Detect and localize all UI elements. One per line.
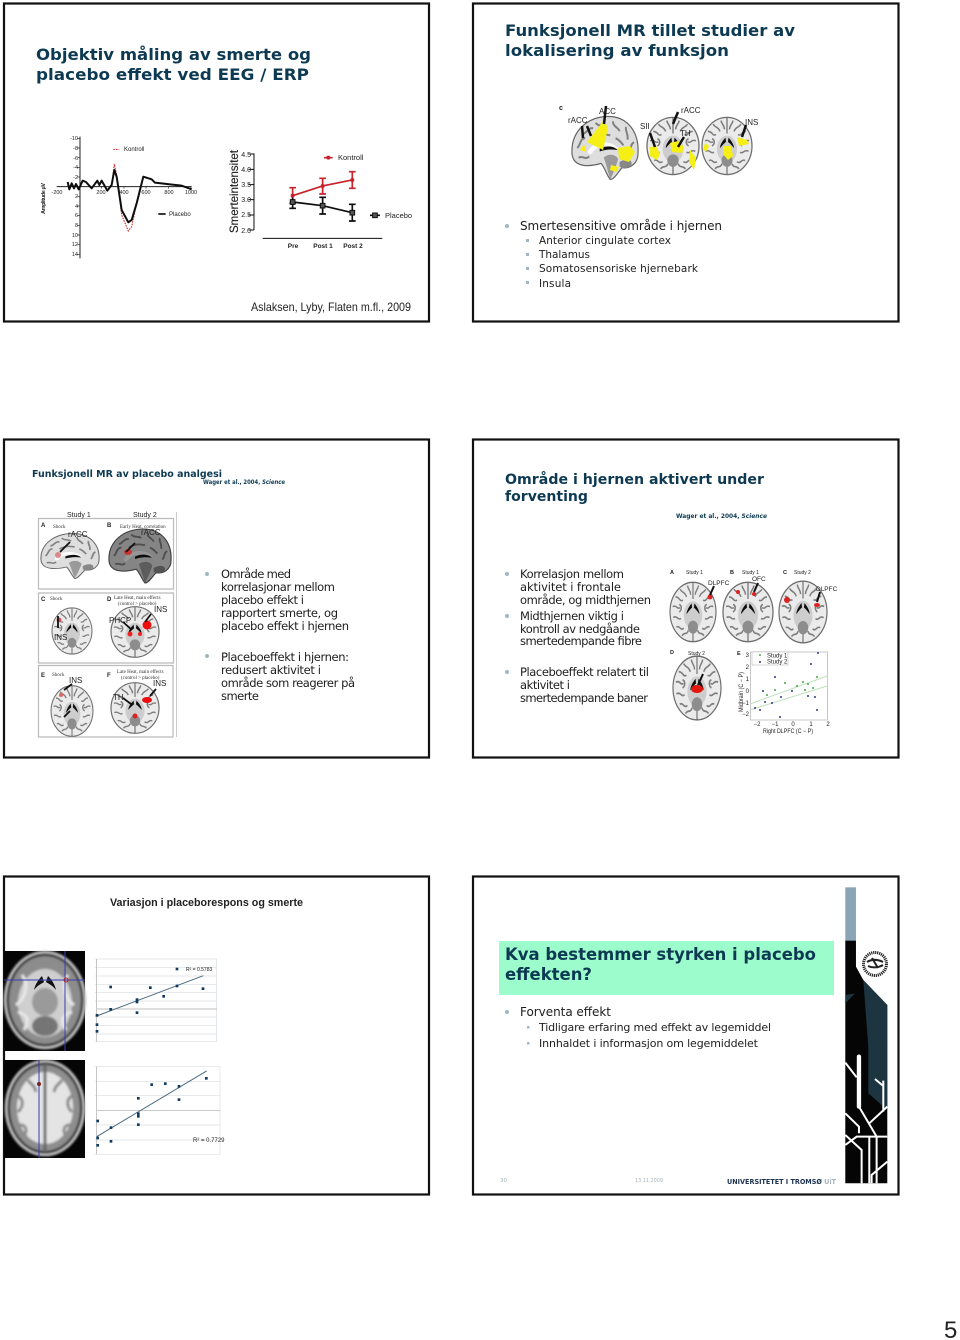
chart: midbrain vs right DLPFC scatter: −2 [754,722,761,728]
figure: study 1 and 2 brain maps [38,512,176,737]
figure: study 1 and 2 brain maps: A [41,523,46,529]
title: forventing [505,489,588,505]
chart: midbrain vs right DLPFC scatter: Study 2 [767,660,788,666]
citation: Wager et al., 2004, Science [203,479,285,486]
figure: study 1 and 2 brain maps: (control > placebo) [121,676,160,681]
chart: ERP amplitude waveform: -2 [73,175,78,181]
chart: midbrain vs right DLPFC scatter: Study 1 [767,654,788,660]
chart: pain intensity: Placebo [385,211,412,220]
figure: study 1 and 2 brain maps: INS [153,679,166,688]
bullet list: redusert aktivitet i [221,663,321,677]
bullet list: Tidligare erfaring med effekt av legemiddel [538,1021,771,1034]
chart: pain intensity [227,149,412,250]
chart: midbrain vs right DLPFC scatter: Midbrain (C − P) [739,672,745,712]
bullet list: Forventa effekt [520,1005,611,1019]
bullet list: Somatosensoriske hjernebark [539,263,699,275]
figure: study 1 and 2 brain maps: INS [154,605,167,614]
panel: variation in placebo response and pain [4,876,429,1194]
bullet list: placebo effekt i [221,593,304,607]
chart: ERP amplitude waveform: 6 [75,213,78,219]
chart: midbrain vs right DLPFC scatter [739,652,830,735]
chart: pain intensity: 2.5 [241,212,251,219]
chart: midbrain vs right DLPFC scatter: 2 [826,722,830,728]
bullet list: smertedempande baner [520,691,648,705]
figure: DLPFC brain maps: Study 1 [686,570,703,576]
chart: ERP amplitude waveform [41,136,197,258]
bullet list: område, og midthjernen [520,593,651,607]
chart: ERP amplitude waveform: 14 [72,252,78,258]
chart: midbrain vs right DLPFC scatter: 0 [746,689,750,695]
figure: brain activation maps: c [559,105,563,112]
chart: midbrain vs right DLPFC scatter: 1 [746,677,750,683]
chart: ERP amplitude waveform: 800 [164,190,174,196]
bullet list: aktivitet i [520,678,570,692]
footer: slide number and date [500,1178,663,1184]
chart: pain intensity: Pre [288,243,299,250]
chart: midbrain vs right DLPFC scatter: −1 [742,701,750,707]
bullet list: kontroll av nedgåande [520,622,640,636]
chart: ERP amplitude waveform: 2 [75,194,78,200]
figure: DLPFC brain maps: OFC [752,576,766,583]
chart: ERP amplitude waveform: 400 [119,190,129,196]
panel: fMRI localisation [473,4,898,322]
chart: midbrain vs right DLPFC scatter: −1 [772,722,779,728]
bullet list: Korrelasjon mellom [520,567,624,581]
chart: regression 2 R2 0.7729 [95,1067,225,1154]
chart: midbrain vs right DLPFC scatter: 3 [746,653,750,659]
figure: DLPFC brain maps: Study 2 [688,651,705,657]
bullet list: Midthjernen viktig i [520,609,624,623]
bullet list [505,219,722,290]
bullet list: Innhaldet i informasjon om legemiddelet [539,1037,759,1050]
citation: Aslaksen, Lyby, Flaten m.fl., 2009 [251,300,411,314]
figure: study 1 and 2 brain maps: PHCP [109,616,131,625]
title: placebo effekt ved EEG / ERP [36,65,309,84]
chart: pain intensity: 3.5 [241,182,251,189]
title banner: Kva bestemmer styrken i placebo [505,945,816,965]
title [505,471,764,505]
chart: ERP amplitude waveform: -4 [73,165,78,171]
chart: ERP amplitude waveform: -200 [51,190,63,196]
chart: ERP amplitude waveform: Amplitude µV [41,183,47,214]
figure: study 1 and 2 brain maps: INS [69,676,82,685]
figure: DLPFC brain maps: Study 1 [742,570,759,576]
figure: study 1 and 2 brain maps: C [41,597,46,603]
figure: DLPFC brain maps: A [670,570,674,576]
title banner [499,941,834,995]
figure: brain activation maps [559,105,758,180]
figure: brain activation maps: TH [680,129,691,138]
chart: ERP amplitude waveform: Kontroll [124,147,144,153]
chart: ERP amplitude waveform: 12 [72,242,78,248]
title [505,21,796,60]
figure: brain activation maps: rACC [568,116,588,125]
chart: ERP amplitude waveform: 600 [141,190,151,196]
chart: ERP amplitude waveform: -6 [73,156,78,162]
bullet list: område som reagerer på [221,676,355,690]
figure: study 1 and 2 brain maps: Shock [53,525,66,530]
chart: pain intensity: Post 1 [313,243,333,250]
bullet list: korrelasjonar mellom [221,580,335,594]
bullet list: smertedempande fibre [520,634,642,648]
university seal [864,952,886,976]
figure: study 1 and 2 brain maps: D [107,597,112,603]
chart: ERP amplitude waveform: 1000 [185,190,197,196]
figure: study 1 and 2 brain maps: rACC [68,530,88,539]
chart: midbrain vs right DLPFC scatter: 0 [791,722,795,728]
bullet list: rapportert smerte, og [221,606,338,620]
chart: pain intensity: Post 2 [343,243,363,250]
title [36,45,311,84]
chart: midbrain vs right DLPFC scatter: 1 [809,722,813,728]
panel: EEG / ERP objective measurement [4,4,429,322]
bullet list: Smertesensitive område i hjernen [520,219,722,233]
bullet list [505,567,651,705]
bullet list [205,567,355,703]
figure: study 1 and 2 brain maps: Late Heat, main effects [114,596,161,601]
chart: pain intensity: 2.0 [241,228,251,235]
title: lokalisering av funksjon [505,41,729,60]
panel: brain area activated during expectation [473,440,898,758]
chart: ERP amplitude waveform: 10 [72,233,78,239]
figure: study 1 and 2 brain maps: Late Heat, main effects [117,670,164,675]
footer: university logotype: UNIVERSITETET I TROMSØ UiT [727,1178,836,1186]
title: Funksjonell MR tillet studier av [505,21,796,40]
title: Funksjonell MR av placebo analgesi [32,469,222,480]
figure: brain activation maps: rACC [681,106,701,115]
bullet list: Placeboeffekt relatert til [520,665,649,679]
citation: Wager et al., 2004, Science [676,512,768,520]
title: Område i hjernen aktivert under [505,471,764,488]
chart: midbrain vs right DLPFC scatter: 2 [746,665,750,671]
figure: brain activation maps: ACC [599,107,616,116]
chart: pain intensity: 4.0 [241,167,251,174]
sidebar decoration [845,887,887,1183]
bullet list [505,1005,771,1050]
brain scan 2 [4,1060,85,1158]
chart: regression 1 R2 0.5783: R² = 0.5783 [186,967,212,973]
figure: brain activation maps: INS [745,118,758,127]
title: Objektiv måling av smerte og [36,45,311,64]
chart: regression 1 R2 0.5783 [95,959,217,1042]
figure: study 1 and 2 brain maps: rACC [141,528,161,537]
bullet list: Thalamus [538,249,590,261]
figure: study 1 and 2 brain maps: Shock [52,673,65,678]
chart: pain intensity: Smerteintensitet [227,149,241,233]
title banner: effekten? [505,965,592,985]
chart: midbrain vs right DLPFC scatter: −2 [742,712,750,718]
figure: DLPFC brain maps: E [737,651,741,657]
figure: study 1 and 2 brain maps: Early Heat, correlation [120,525,166,530]
panel: fMRI placebo analgesia [4,440,429,758]
bullet list: smerte [221,689,259,703]
figure: DLPFC brain maps: D [670,650,674,656]
bullet list: Område med [221,567,291,581]
footer: slide number and date: 30 [500,1178,507,1184]
bullet list: aktivitet i frontale [520,580,621,594]
bullet list: Anterior cingulate cortex [539,235,671,247]
chart: ERP amplitude waveform: 8 [75,223,78,229]
title: Variasjon i placeborespons og smerte [110,897,303,909]
panel: what determines placebo strength [473,876,898,1194]
bullet list: placebo effekt i hjernen [221,619,349,633]
figure: DLPFC brain maps: C [783,570,787,576]
brain scan 1 [4,951,85,1051]
chart: ERP amplitude waveform: -8 [73,146,78,152]
figure: study 1 and 2 brain maps: B [107,523,112,529]
figure: study 1 and 2 brain maps: TH [113,693,124,702]
figure: study 1 and 2 brain maps: INS [54,633,67,642]
bullet list: Insula [539,278,571,290]
chart: ERP amplitude waveform: -10 [70,136,78,142]
figure: study 1 and 2 brain maps: (control > placebo) [118,602,157,607]
chart: pain intensity: 3.0 [241,197,251,204]
chart: pain intensity: 4.5 [241,152,251,159]
figure: study 1 and 2 brain maps: E [41,673,45,679]
figure: DLPFC brain maps: DLPFC [816,586,838,593]
figure: study 1 and 2 brain maps: Study 1 [67,512,91,519]
footer: slide number and date: 13.11.2009 [635,1178,663,1184]
chart: ERP amplitude waveform: Placebo [169,212,191,218]
figure: DLPFC brain maps: DLPFC [708,580,730,587]
figure: DLPFC brain maps [670,570,838,720]
figure: brain activation maps: SII [640,122,650,131]
bullet list: Placeboeffekt i hjernen: [221,650,349,664]
figure: study 1 and 2 brain maps: F [107,673,111,679]
figure: DLPFC brain maps: B [730,570,734,576]
figure: DLPFC brain maps: Study 2 [794,570,811,576]
chart: midbrain vs right DLPFC scatter: Right DLPFC (C − P) [763,729,813,735]
figure: study 1 and 2 brain maps: Study 2 [133,512,157,519]
figure: study 1 and 2 brain maps: Shock [50,597,63,602]
chart: ERP amplitude waveform: 4 [75,204,78,210]
chart: ERP amplitude waveform: 200 [96,190,106,196]
chart: regression 2 R2 0.7729: R² = 0.7729 [193,1138,225,1144]
chart: pain intensity: Kontroll [338,153,364,162]
